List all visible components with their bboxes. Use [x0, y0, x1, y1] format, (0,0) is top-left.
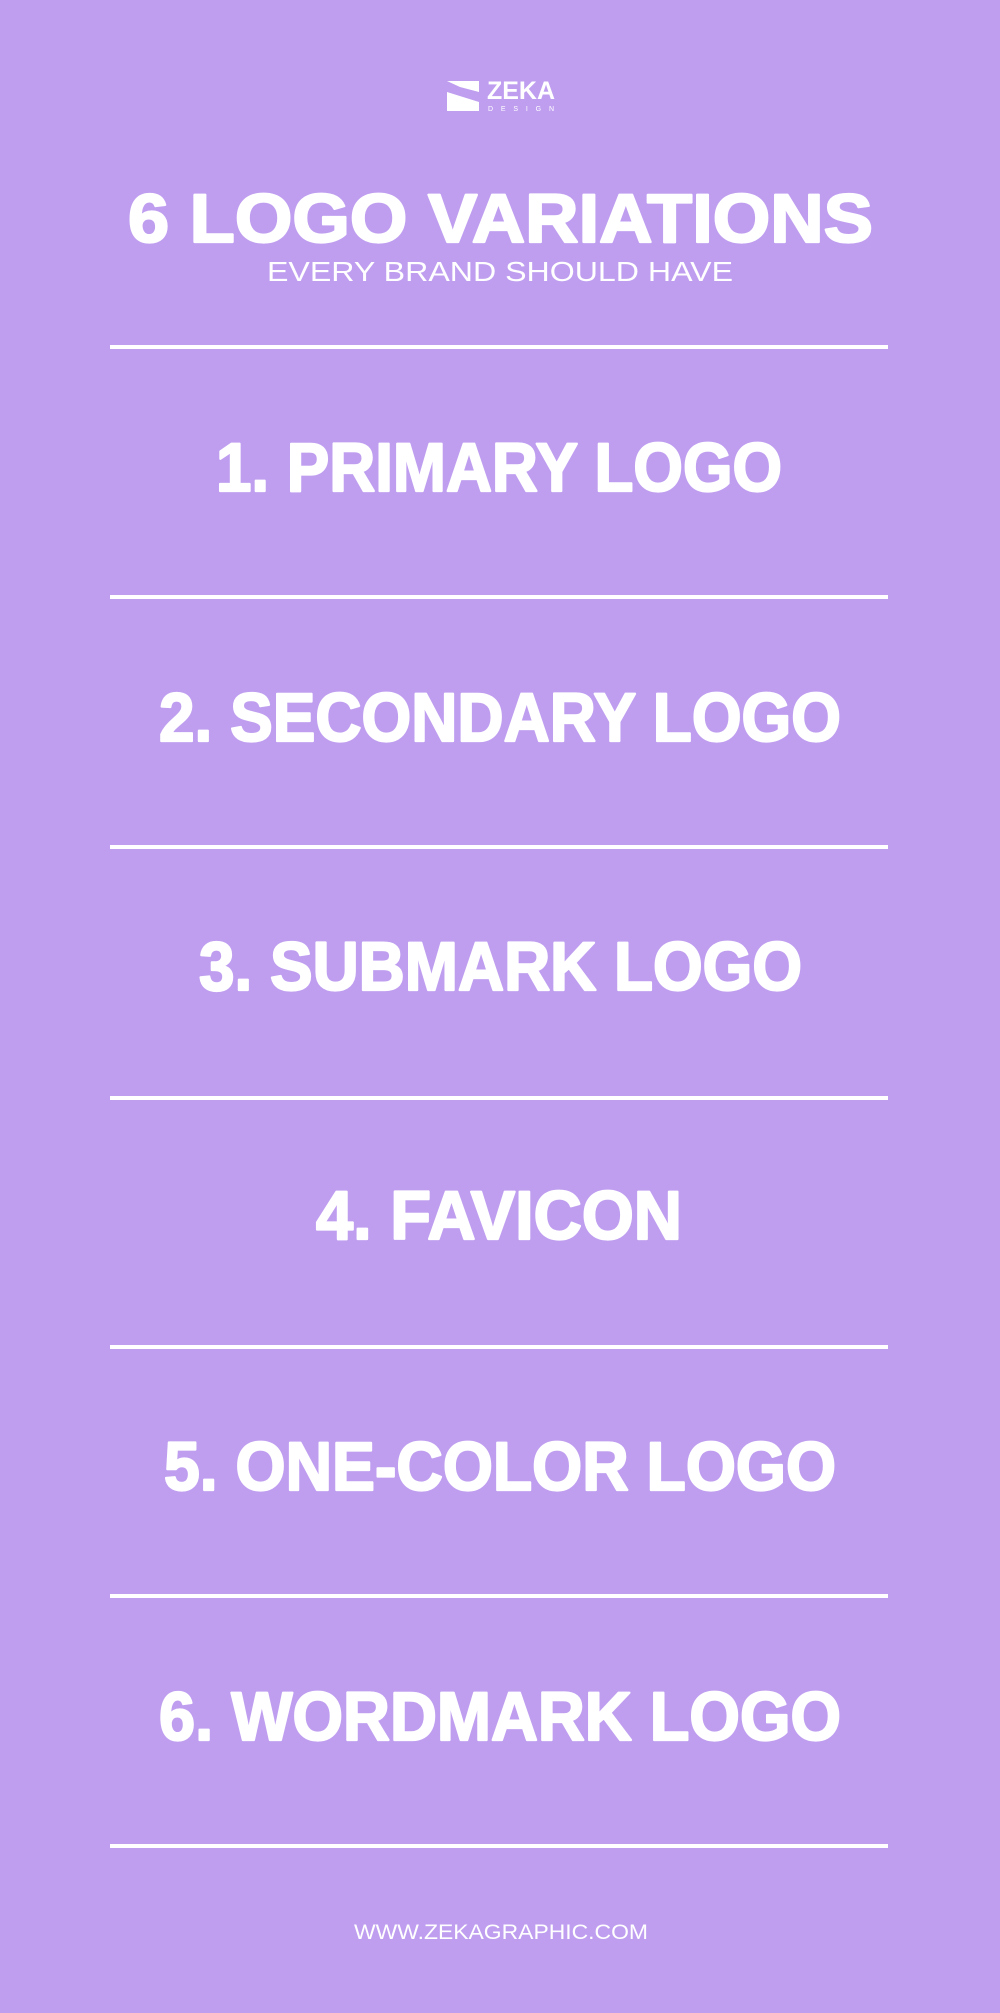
title [128, 180, 873, 285]
icon: zeka mark [447, 81, 479, 111]
logo wordmark: DESIGN [488, 106, 554, 113]
footer url: WWW.ZEKAGRAPHIC.COM [354, 1921, 648, 1944]
logo: zeka design [447, 78, 555, 113]
title: 6 LOGO VARIATIONS [128, 180, 873, 257]
